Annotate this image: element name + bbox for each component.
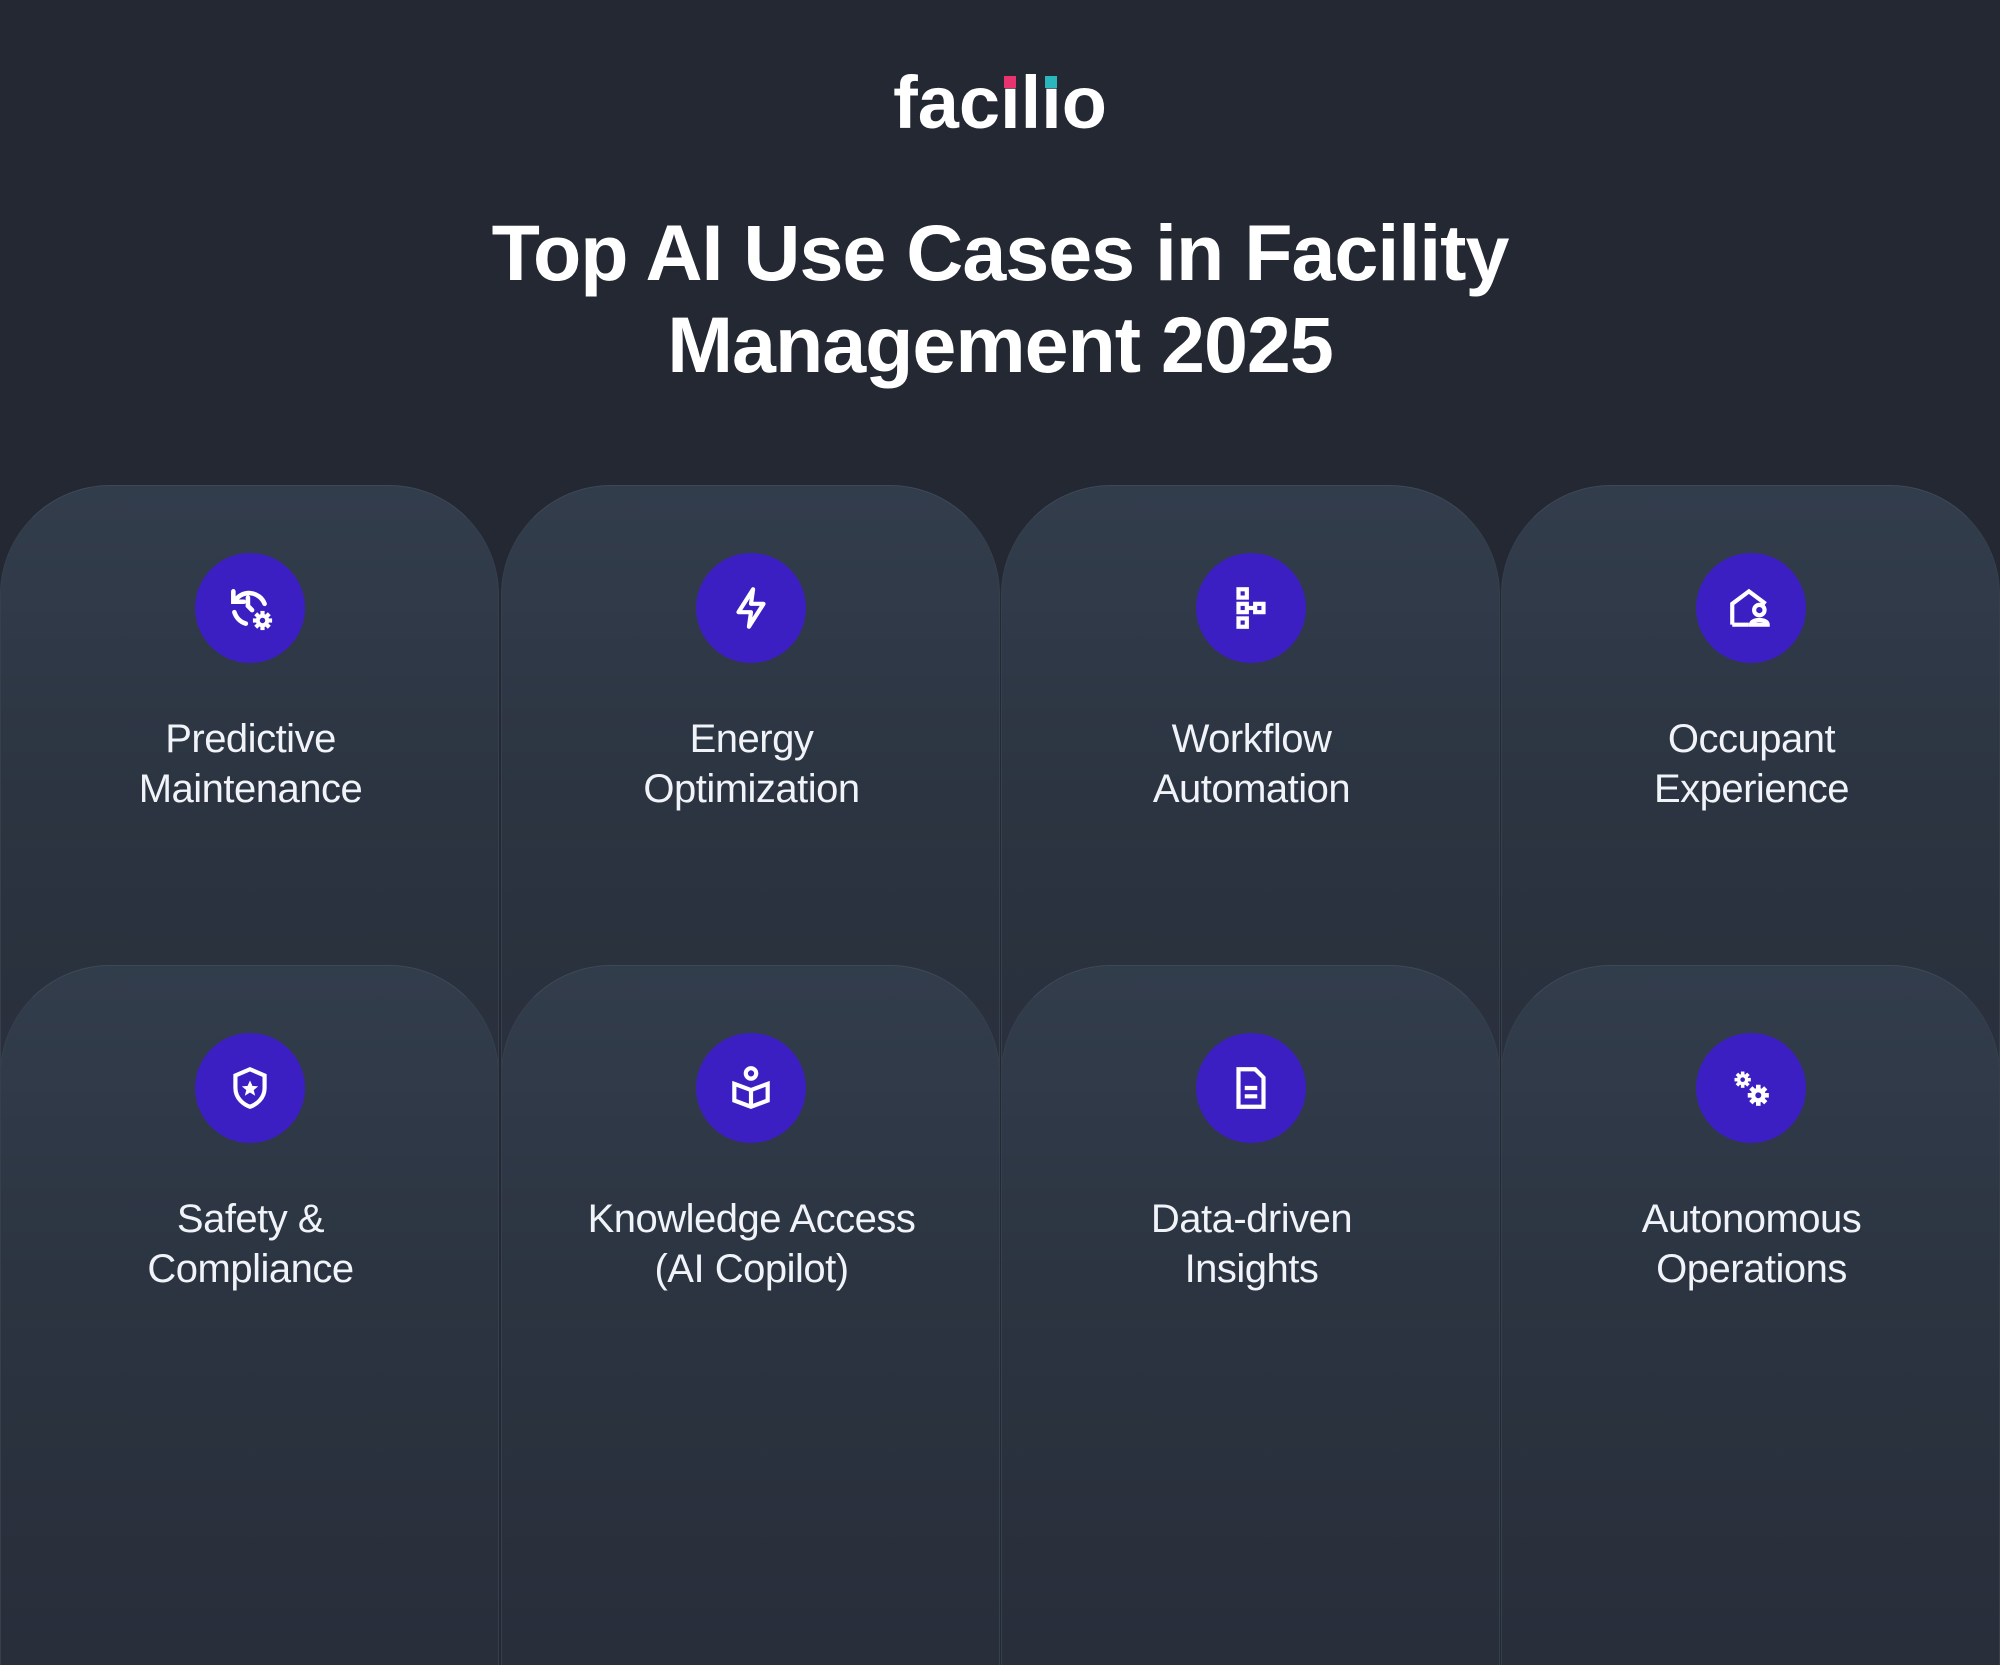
label: Experience (1654, 767, 1849, 811)
label: Knowledge Access (588, 1197, 915, 1241)
panel: predictive maintenance (0, 485, 499, 1185)
panel: safety (0, 965, 499, 1665)
label: (AI Copilot) (654, 1247, 849, 1291)
label (1642, 1197, 1861, 1291)
icon: clock with gear (195, 553, 305, 663)
icon: shield star (195, 1033, 305, 1143)
label (139, 717, 362, 811)
panel: data insights (1001, 965, 1500, 1665)
title (492, 208, 1509, 389)
label: Occupant (1668, 717, 1835, 761)
label: Energy (690, 717, 813, 761)
panel: energy (501, 485, 1000, 1185)
logo: ı (1041, 61, 1062, 144)
title: Top AI Use Cases in Facility (492, 208, 1508, 297)
label: Optimization (643, 767, 860, 811)
icon: gears (1696, 1033, 1806, 1143)
icon: book person (696, 1033, 806, 1143)
label: Predictive (165, 717, 336, 761)
label: Autonomous (1642, 1197, 1861, 1241)
label (588, 1197, 915, 1291)
label: Maintenance (139, 767, 362, 811)
logo: fac l o (893, 61, 1107, 144)
label (1151, 1197, 1352, 1291)
label (1654, 717, 1849, 811)
label: Automation (1153, 767, 1350, 811)
icon: workflow (1196, 553, 1306, 663)
label: Safety & (177, 1197, 324, 1241)
label: Data-driven (1151, 1197, 1352, 1241)
panel: occupant (1501, 485, 2000, 1185)
icon: home person (1696, 553, 1806, 663)
panel: autonomous (1501, 965, 2000, 1665)
label: Compliance (147, 1247, 354, 1291)
label: Insights (1185, 1247, 1318, 1291)
label: Workflow (1172, 717, 1331, 761)
label (1153, 717, 1350, 811)
panel: knowledge (501, 965, 1000, 1665)
label: Operations (1656, 1247, 1847, 1291)
icon: lightning (696, 553, 806, 663)
title: Management 2025 (667, 300, 1333, 389)
panel: workflow (1001, 485, 1500, 1185)
icon: document (1196, 1033, 1306, 1143)
logo: ı (1000, 61, 1021, 144)
label (147, 1197, 354, 1291)
label (643, 717, 860, 811)
